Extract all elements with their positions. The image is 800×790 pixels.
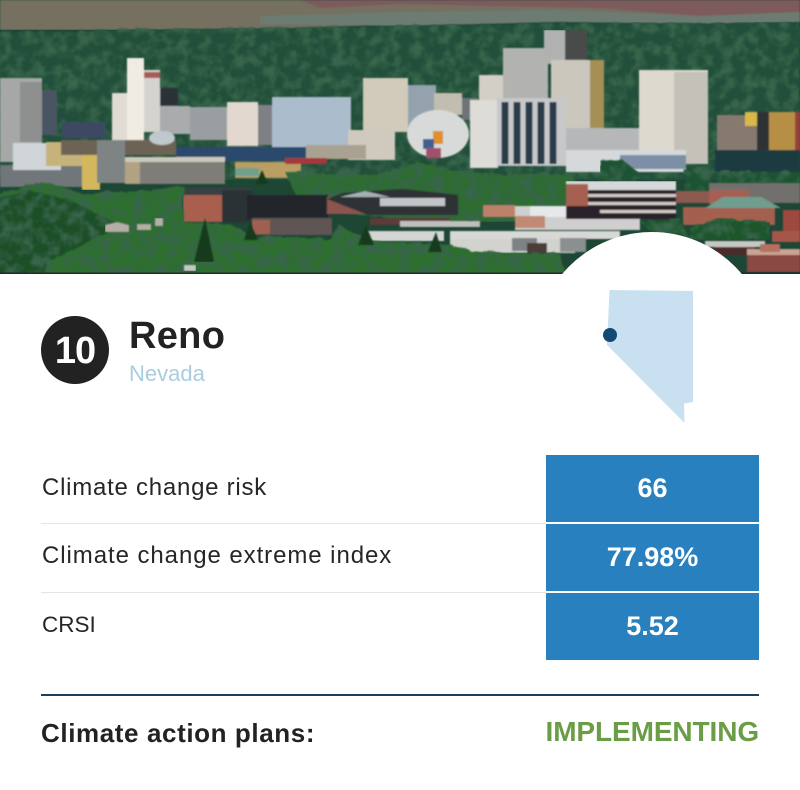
metric value: climate change risk [546,455,759,522]
climate action plans label: Climate action plans: [41,718,315,748]
hills [0,0,800,30]
city name: Reno [129,315,225,357]
climate action plans status: IMPLEMENTING [546,716,759,747]
downtown towers [0,30,800,190]
metric value: CRSI [546,593,759,660]
metric label: climate change risk: Climate change risk [42,474,267,501]
Nevada state map with location dot [603,290,693,423]
metric value: extreme index [546,524,759,591]
mid trees [285,162,590,222]
rank badge [41,316,109,384]
rank badge: 10 [55,330,95,372]
hero photo: Reno skyline [0,0,800,274]
back forest [0,22,800,180]
cypress trees [194,170,442,262]
metric value: climate change risk: 66 [637,473,668,503]
campus buildings [183,181,800,272]
metric value: extreme index: 77.98% [607,542,698,572]
metric label: CRSI: CRSI [42,612,96,637]
metric label: extreme index: Climate change extreme index [42,542,392,569]
state name: Nevada [129,361,205,386]
metric value: CRSI: 5.52 [626,611,679,641]
small rooftops [105,218,196,271]
foreground trees [0,182,570,290]
white circular notch behind map [535,232,769,466]
